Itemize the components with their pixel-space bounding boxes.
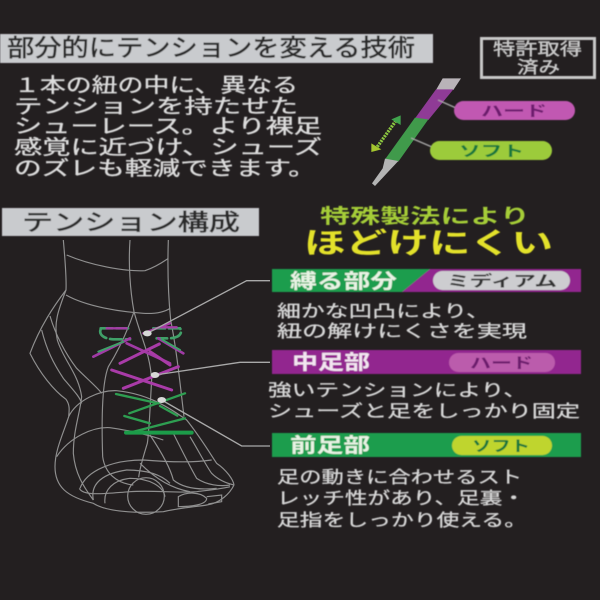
- label bar: [272, 433, 581, 457]
- callout: soft: [411, 138, 552, 160]
- text block: introduction: １本の紐の中に、異なる: [14, 74, 298, 97]
- description: レッチ性があり、足裏・: [277, 489, 525, 508]
- description: 紐の解けにくさを実現: [277, 322, 527, 341]
- panel: tied section: [272, 269, 581, 341]
- foot outline: [30, 240, 234, 514]
- description: [277, 302, 527, 341]
- diagram: foot with laces: [30, 240, 270, 514]
- heading: hard to untie: 特殊製法により: [320, 205, 530, 228]
- description: 足の動きに合わせるスト: [277, 468, 522, 487]
- callout: hard: ハード: [481, 103, 547, 120]
- panel: forefoot: [272, 433, 581, 530]
- heading: tension structure: [2, 208, 259, 236]
- badge: patent acquired: 済み: [517, 58, 560, 77]
- laces: midfoot section: [112, 344, 178, 390]
- icon: stretch arrow: [371, 115, 401, 152]
- description: 強いテンションにより、: [268, 381, 527, 400]
- text block: introduction: シューレース。より裸足: [14, 115, 322, 138]
- badge: patent acquired: [482, 38, 594, 78]
- heading: hard to untie: ほどけにくい: [304, 227, 553, 260]
- diagram: shoelace tension: [371, 78, 575, 186]
- label bar: [272, 350, 581, 374]
- label bar: ソフト: [472, 438, 530, 455]
- description: 細かな凹凸により、: [277, 302, 490, 321]
- callout: hard: [438, 100, 575, 120]
- label bar: ハード: [470, 355, 533, 372]
- text block: introduction: のズレも軽減できます。: [14, 157, 316, 180]
- description: [268, 381, 580, 421]
- text block: introduction: テンションを持たせた: [14, 95, 298, 118]
- heading: hard to untie: [304, 205, 553, 260]
- label bar: 中足部: [292, 351, 370, 374]
- text block: introduction: [14, 74, 322, 180]
- label bar: ミディアム: [447, 272, 557, 290]
- laces: tied section: [93, 323, 192, 433]
- laces: forefoot section: [116, 393, 185, 433]
- panel: midfoot: [268, 350, 581, 421]
- label bar: 縛る部分: [290, 269, 397, 293]
- badge: patent acquired: 特許取得: [493, 40, 582, 59]
- description: 足指をしっかり使える。: [277, 510, 527, 530]
- label bar: [272, 269, 581, 293]
- icon: shoelace tube: [372, 78, 461, 186]
- description: [277, 468, 527, 530]
- heading: tension structure: テンション構成: [22, 209, 240, 235]
- lace points: [143, 330, 166, 403]
- callout: soft: ソフト: [459, 143, 524, 160]
- leader lines: [147, 281, 270, 446]
- label bar: 前足部: [290, 434, 370, 457]
- description: シューズと足をしっかり固定: [268, 402, 580, 421]
- text block: introduction: 感覚に近づけ、シューズ: [14, 136, 322, 159]
- heading: technology title: 部分的にテンションを変える技術: [7, 35, 415, 62]
